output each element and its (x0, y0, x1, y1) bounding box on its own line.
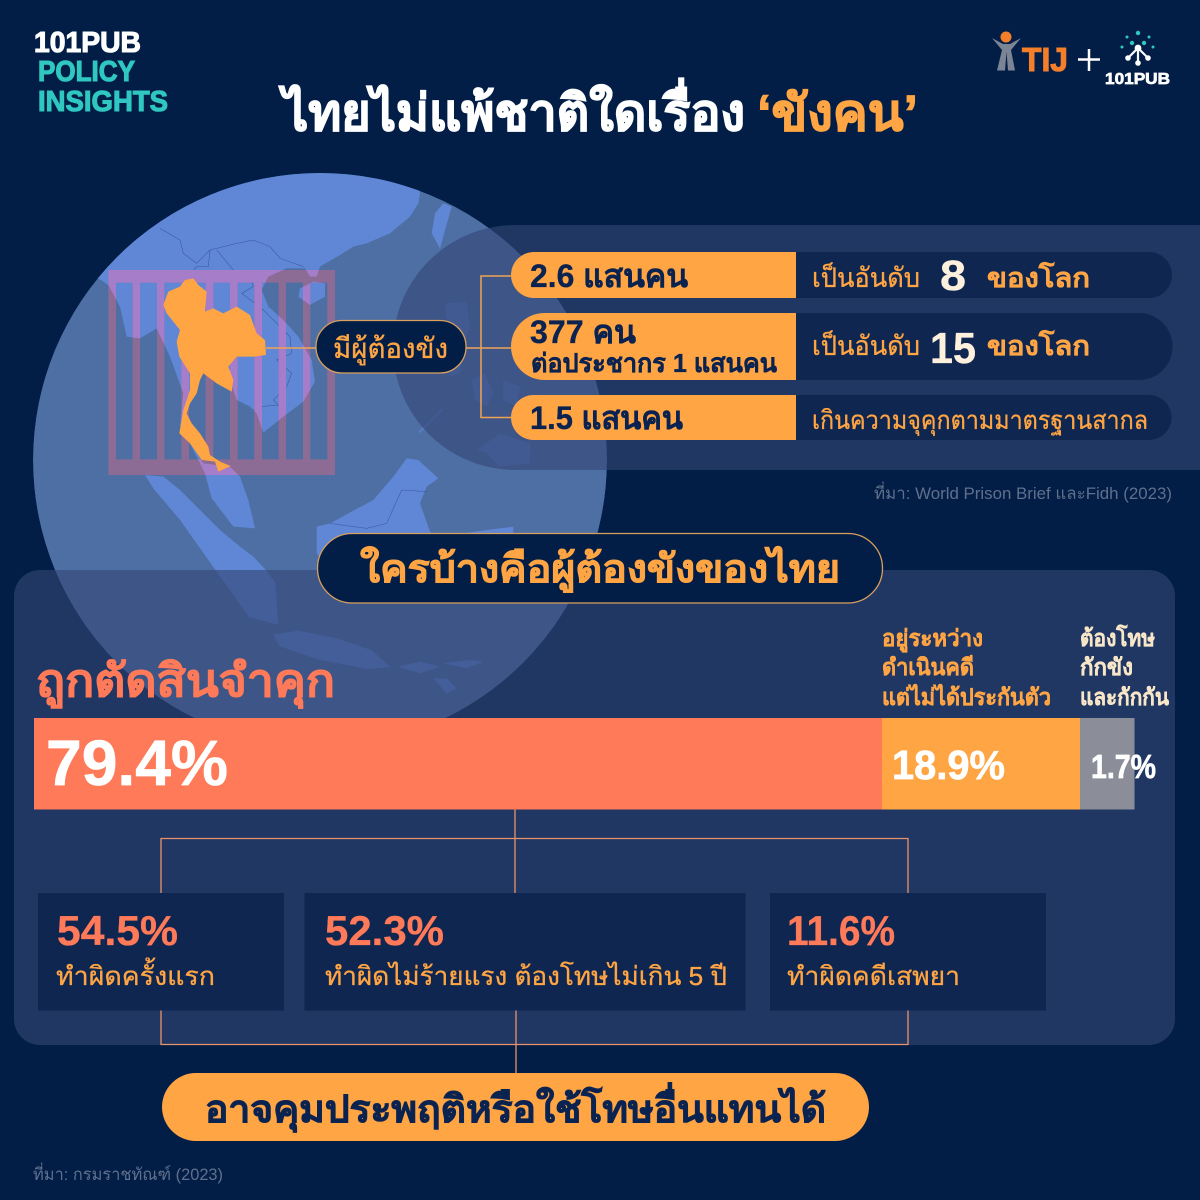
card: non-serious offence (304, 893, 746, 1010)
stacked bar chart: 18.9% (892, 742, 1005, 788)
logo: 101PUB Policy Insights: 101PUB (34, 27, 141, 59)
section heading pill (318, 534, 882, 603)
stacked bar chart: 79.4% (46, 727, 228, 799)
row: 2.6 hundred thousand (511, 252, 1172, 300)
map of Thailand (163, 278, 266, 472)
logo: TIJ + 101PUB: TIJ (1022, 41, 1068, 78)
row: 1.5 hundred thousand: 1.5 แสนคน (530, 400, 683, 436)
label: detention: กักขัง (1080, 654, 1133, 680)
card: non-serious offence: ทำผิดไม่ร้ายแรง ต้องโทษไม่เกิน 5 ปี (325, 961, 727, 991)
label: detention (1080, 624, 1169, 710)
card: drug offence: 11.6% (787, 907, 895, 954)
row: 377 per 100,000: ต่อประชากร 1 แสนคน (531, 348, 777, 378)
stacked bar chart (34, 718, 1156, 810)
row: 1.5 hundred thousand: เกินความจุคุกตามมาตรฐานสากล (812, 405, 1148, 436)
logo: TIJ + 101PUB: 101PUB (1105, 71, 1170, 88)
row: 2.6 hundred thousand: 8 (940, 252, 966, 300)
source top: ที่มา: World Prison Brief และFidh (2023) (874, 481, 1172, 503)
heading: sentenced: ถูกตัดสินจำคุก (36, 655, 335, 709)
card: first offence: ทำผิดครั้งแรก (56, 957, 215, 991)
card: drug offence (770, 893, 1046, 1010)
title (278, 78, 918, 141)
title: ไทยไม่แพ้ชาติใดเรื่อง (278, 78, 745, 141)
title: ‘ขังคน’ (757, 85, 918, 141)
stacked bar chart: 1.7% (1091, 748, 1156, 785)
label: awaiting trial: ดำเนินคดี (882, 654, 974, 680)
section heading pill: ใครบ้างคือผู้ต้องขังของไทย (360, 546, 840, 593)
card: non-serious offence: 52.3% (325, 907, 444, 954)
tree connector (161, 810, 908, 1073)
card: first offence (38, 893, 284, 1010)
logo: TIJ + 101PUB (992, 31, 1170, 88)
row: 2.6 hundred thousand: เป็นอันดับ (812, 260, 920, 293)
source bottom: ที่มา: กรมราชทัณฑ์ (2023) (33, 1162, 223, 1184)
connector lines (266, 276, 511, 418)
conclusion pill: อาจคุมประพฤติหรือใช้โทษอื่นแทนได้ (205, 1082, 826, 1133)
label: awaiting trial: แต่ไม่ได้ประกันตัว (882, 683, 1051, 710)
label: awaiting trial (882, 625, 1051, 710)
row: 1.5 hundred thousand (511, 395, 1172, 440)
row: 377 per 100,000: ของโลก (987, 329, 1090, 361)
label: detention: ต้องโทษ (1080, 624, 1155, 651)
row: 2.6 hundred thousand: 2.6 แสนคน (530, 258, 688, 294)
lower panel (14, 570, 1175, 1045)
logo: 101PUB Policy Insights (34, 27, 168, 118)
card: first offence: 54.5% (57, 907, 178, 954)
label: detention: และกักกัน (1080, 684, 1169, 710)
row: 377 per 100,000: 15 (930, 324, 976, 373)
callout: inmates: มีผู้ต้องขัง (333, 333, 448, 366)
statistics band (393, 225, 1200, 470)
prison bars (108, 270, 335, 475)
logo: 101PUB Policy Insights: POLICY (38, 56, 135, 88)
row: 377 per 100,000 (511, 313, 1172, 380)
callout: inmates (316, 320, 466, 373)
globe map (33, 173, 607, 718)
label: awaiting trial: อยู่ระหว่าง (882, 625, 983, 653)
row: 377 per 100,000: เป็นอันดับ (812, 328, 920, 361)
row: 2.6 hundred thousand: ของโลก (987, 261, 1090, 293)
row: 377 per 100,000: 377 คน (530, 314, 636, 350)
card: drug offence: ทำผิดคดีเสพยา (787, 961, 960, 991)
conclusion pill (162, 1073, 869, 1141)
logo: 101PUB Policy Insights: INSIGHTS (38, 86, 168, 118)
